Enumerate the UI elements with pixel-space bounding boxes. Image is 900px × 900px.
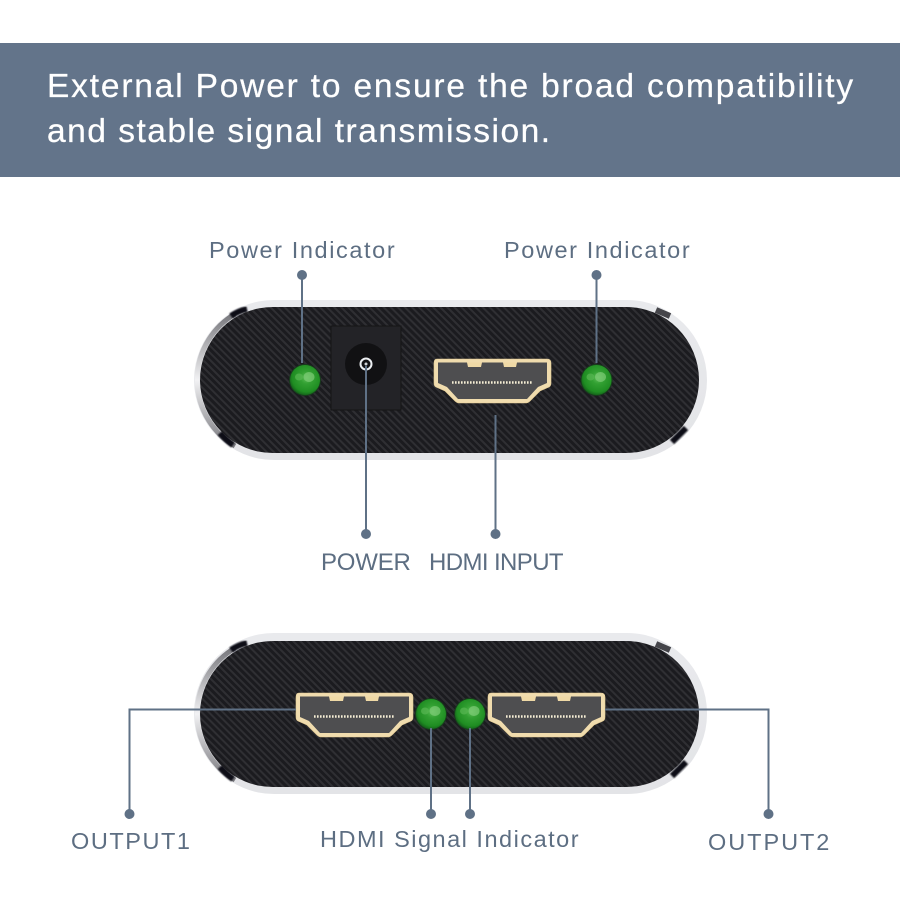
leader lines and dots — [124, 270, 774, 819]
label: output 1: OUTPUT1 — [71, 828, 192, 854]
header banner — [0, 43, 900, 177]
header title: External Power to ensure the broad compatibility — [47, 68, 855, 105]
HDMI input port — [434, 359, 551, 403]
label: power indicator left: Power Indicator — [209, 237, 396, 263]
signal LED 1 — [415, 698, 447, 730]
label: power: POWER — [321, 549, 411, 576]
header title: and stable signal transmission. — [47, 113, 552, 150]
device: output side — [194, 633, 707, 794]
label: HDMI input: HDMI INPUT — [429, 549, 564, 576]
signal LED 2 — [454, 698, 486, 730]
HDMI output port 2 — [488, 693, 605, 737]
label: output 2: OUTPUT2 — [708, 829, 831, 855]
left LED — [289, 364, 321, 396]
device: input side — [194, 300, 707, 460]
HDMI output port 1 — [296, 693, 413, 737]
power jack — [331, 326, 401, 410]
label: power indicator right: Power Indicator — [504, 237, 691, 263]
right LED — [580, 364, 612, 396]
label: HDMI signal indicator: HDMI Signal Indicator — [320, 826, 580, 852]
